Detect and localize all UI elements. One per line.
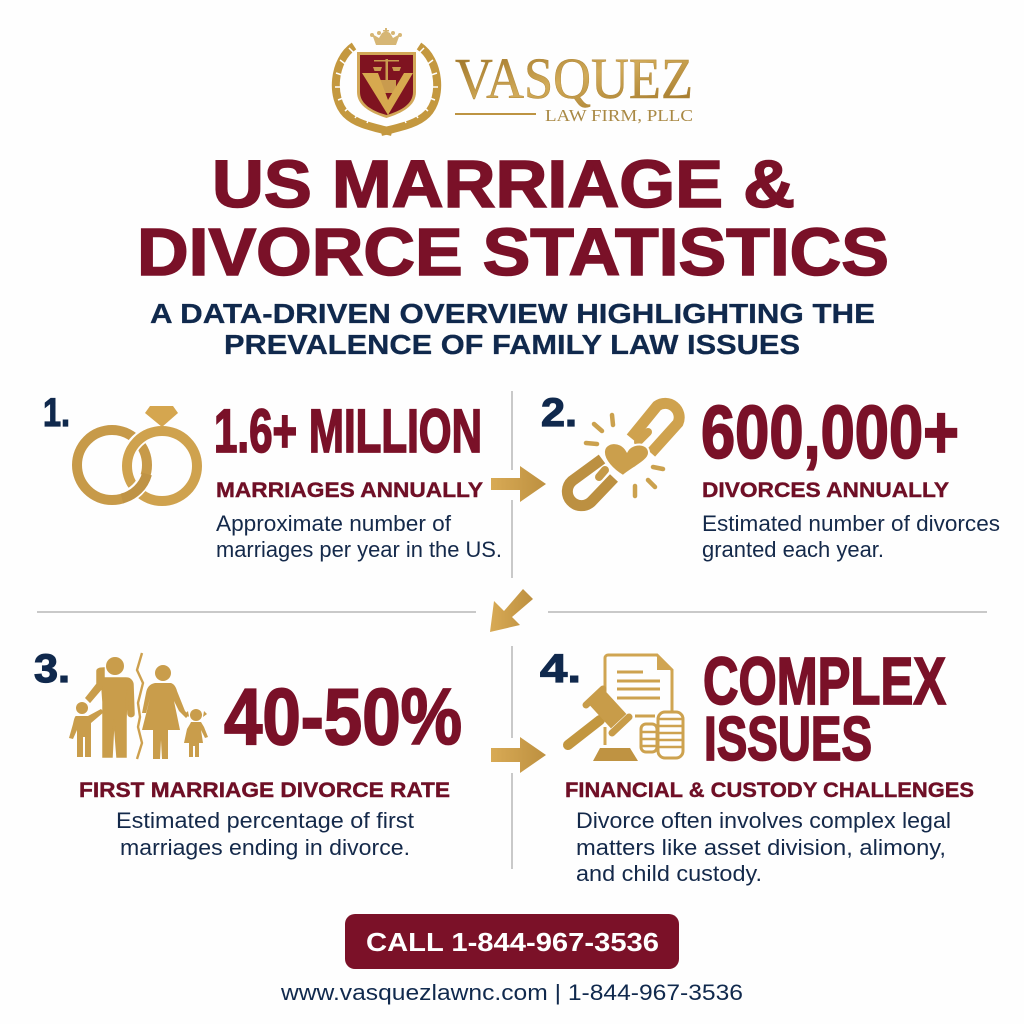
icon: shield [357, 52, 416, 118]
stat label: FIRST MARRIAGE DIVORCE RATE [79, 779, 450, 802]
icon: wedding rings [77, 406, 197, 501]
title: US MARRIAGE & [212, 147, 795, 222]
number 3: 3. [34, 647, 70, 691]
description [576, 808, 951, 886]
description: Divorce often involves complex legal [576, 808, 951, 833]
description: Estimated number of divorces [702, 511, 1000, 536]
subtitle: PREVALENCE OF FAMILY LAW ISSUES [224, 329, 800, 360]
stat label: DIVORCES ANNUALLY [702, 479, 949, 502]
stat value [703, 644, 946, 774]
icon: right laurel [381, 46, 438, 132]
description [702, 511, 1000, 562]
description: granted each year. [702, 537, 884, 562]
stat value: ISSUES [704, 705, 872, 774]
title [137, 147, 889, 290]
subtitle [150, 298, 875, 360]
logo tagline: LAW FIRM, PLLC [545, 106, 693, 125]
number 2: 2. [541, 391, 577, 435]
stat value: 600,000+ [701, 390, 959, 474]
arrow: 1 to 2 [491, 466, 546, 502]
crack line [137, 653, 143, 759]
icon: gavel, document and coins [568, 655, 683, 761]
stat label: FINANCIAL & CUSTODY CHALLENGES [565, 779, 974, 802]
icon: divided family [69, 657, 208, 759]
title: DIVORCE STATISTICS [137, 215, 889, 290]
description: marriages ending in divorce. [120, 835, 410, 860]
stat value: 40-50% [224, 672, 462, 761]
call button [345, 914, 679, 969]
description: marriages per year in the US. [216, 537, 502, 562]
subtitle: A DATA-DRIVEN OVERVIEW HIGHLIGHTING THE [150, 298, 875, 329]
description: Estimated percentage of first [116, 808, 414, 833]
description [116, 808, 414, 860]
number 4: 4. [540, 647, 581, 691]
arrow: 3 to 4 [491, 737, 546, 773]
description: Approximate number of [216, 511, 452, 536]
description [216, 511, 502, 562]
stat label: MARRIAGES ANNUALLY [216, 479, 483, 502]
footer contact line: www.vasquezlawnc.com | 1-844-967-3536 [280, 980, 743, 1005]
panel: divorces [541, 390, 1000, 562]
logo wordmark: VASQUEZ [455, 46, 693, 111]
panel: marriages [43, 391, 502, 562]
icon: left laurel [335, 46, 392, 132]
stat value: 1.6+ MILLION [214, 397, 482, 465]
call button: CALL 1-844-967-3536 [366, 927, 659, 957]
description: and child custody. [576, 861, 762, 886]
icon: crown [370, 28, 402, 45]
number 1: 1. [43, 391, 70, 435]
panel: first marriage divorce rate [34, 647, 462, 860]
panel: complex issues [540, 644, 974, 886]
description: matters like asset division, alimony, [576, 835, 946, 860]
logo [335, 28, 693, 132]
icon: broken chain [567, 403, 679, 506]
arrow: 2 to 3 [490, 589, 533, 632]
